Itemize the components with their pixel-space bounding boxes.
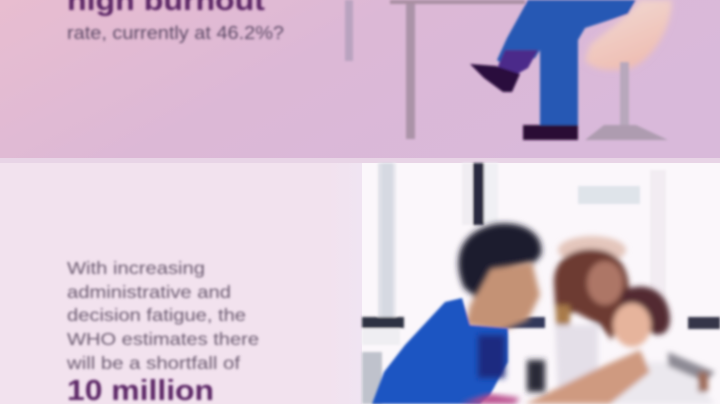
divider strip [0, 158, 720, 163]
text: shortage description: administrative and [67, 282, 231, 302]
text: burnout rate: rate, currently at 46.2%? [67, 23, 284, 43]
window frame [362, 163, 720, 404]
text: shortage description [66, 258, 259, 373]
illustration: desk and seated person [345, 0, 672, 140]
panel: burnout illustration [0, 0, 720, 160]
panel: shortage text [0, 163, 362, 404]
text: shortage description: With increasing [67, 258, 205, 278]
text: shortage description: decision fatigue, the [67, 305, 246, 325]
text: shortage description: will be a shortfall of [66, 353, 240, 373]
figure: clinician [372, 223, 545, 404]
figure: woman and child [525, 236, 715, 404]
text: shortage description: WHO estimates there [67, 329, 259, 349]
photo: clinician with mother and child [362, 163, 720, 404]
